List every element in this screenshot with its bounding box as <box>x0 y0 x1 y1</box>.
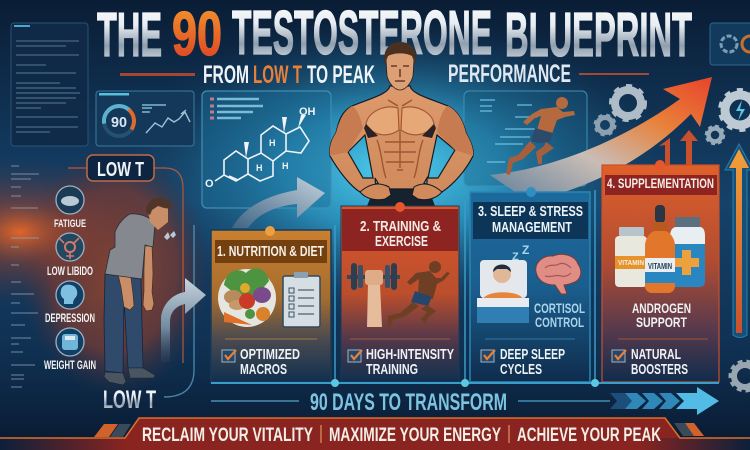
shirt <box>105 214 155 279</box>
icon: brain <box>536 254 581 294</box>
low T label <box>68 155 183 363</box>
panel: molecule chart: H <box>282 161 288 171</box>
icon: sleeping person: Z <box>522 243 529 257</box>
symptom: low libido <box>47 233 93 278</box>
check item: OPTIMIZED <box>240 346 300 363</box>
body <box>330 86 473 192</box>
check item: TRAINING <box>366 361 418 378</box>
hair <box>384 42 416 64</box>
shoulder shading <box>330 106 473 156</box>
check item: HIGH-INTENSITY <box>366 346 454 363</box>
figure: tired man <box>104 198 176 385</box>
panel: molecule chart: H <box>269 138 276 148</box>
title: 90 <box>172 0 222 69</box>
arms <box>115 246 154 311</box>
check item: BOOSTERS <box>631 361 688 378</box>
right up arrow channel <box>725 144 750 338</box>
icon: supplement bottles <box>615 205 705 293</box>
bottom banner: ACHIEVE YOUR PEAK <box>517 425 661 446</box>
panel: 4 supplementation: 4. SUPPLEMENTATION <box>607 176 714 191</box>
low T label: LOW T <box>97 159 144 181</box>
title <box>97 0 692 70</box>
symptom: depression: DEPRESSION <box>45 311 95 325</box>
icon: food plate <box>218 268 276 327</box>
symptom: fatigue: FATIGUE <box>54 218 86 230</box>
divider rails <box>335 190 595 383</box>
panel: 4 supplementation <box>602 160 719 382</box>
structural formula <box>215 126 309 181</box>
text: cortisol control: CORTISOL <box>534 300 585 316</box>
panel: 2 training and exercise: EXERCISE <box>375 233 428 250</box>
text: cortisol control: CONTROL <box>535 314 584 330</box>
face <box>391 66 409 81</box>
check item <box>481 346 565 378</box>
panel: 3 sleep and stress management: 3. SLEEP & STRESS <box>478 203 583 220</box>
jeans <box>104 274 143 373</box>
check item <box>348 346 454 378</box>
icon: supplement bottles: VITAMIN <box>648 262 672 271</box>
panel: data readout top left <box>11 23 88 146</box>
left side notes <box>11 166 39 387</box>
figure: muscular man <box>330 42 473 206</box>
icon: curved arrow to nutrition <box>161 278 206 362</box>
icon: dumbbell and arm <box>347 263 400 327</box>
timeline text: 90 days to transform: 90 DAYS TO TRANSFORM <box>310 389 507 416</box>
icon: checklist clipboard <box>283 272 320 327</box>
symptom: low libido: LOW LIBIDO <box>47 264 93 278</box>
panel: 2 training and exercise: 2. TRAINING & <box>360 218 441 235</box>
arrow: timeline progress <box>518 387 719 415</box>
hair <box>146 198 172 215</box>
check item <box>612 346 688 378</box>
icon: sleeping person <box>477 243 529 323</box>
text: cortisol control <box>534 300 585 330</box>
right hand <box>412 184 442 200</box>
text: androgen support: ANDROGEN <box>632 300 691 316</box>
panel: 3 sleep and stress management: MANAGEMENT <box>492 219 572 236</box>
subtitle: FROM <box>203 61 249 89</box>
title: THE <box>97 1 162 70</box>
head <box>147 205 168 230</box>
symptom: weight gain <box>44 328 96 372</box>
head <box>386 48 414 90</box>
check item: CYCLES <box>500 361 542 378</box>
symptom: weight gain: WEIGHT GAIN <box>44 358 96 372</box>
left hand <box>360 184 391 200</box>
icon: sprinter <box>387 261 450 327</box>
bottom banner: MAXIMIZE YOUR ENERGY <box>329 425 501 446</box>
icon: runner <box>506 97 575 175</box>
pectorals <box>366 107 434 135</box>
check item: DEEP SLEEP <box>500 346 565 363</box>
text: androgen support: SUPPORT <box>636 314 687 330</box>
underarm shadow <box>364 124 436 138</box>
panel: 1 nutrition and diet <box>211 226 331 382</box>
panel: dashboard with 90 gauge <box>96 91 194 146</box>
icon: curved arrow from molecule <box>232 177 325 228</box>
sweat drops <box>164 231 176 240</box>
timeline rail with nodes <box>211 379 719 387</box>
abs and muscle lines <box>377 100 423 178</box>
bottom banner: RECLAIM YOUR VITALITY <box>142 425 313 446</box>
bottom banner <box>0 418 750 450</box>
symptom: fatigue <box>54 186 86 230</box>
check item: NATURAL <box>631 346 681 363</box>
panel: runner display <box>464 91 587 186</box>
subtitle: TO PEAK <box>307 61 375 89</box>
panel: 1 nutrition and diet: 1. NUTRITION & DIET <box>217 243 324 260</box>
left bracket line <box>164 225 194 397</box>
small rising arrows <box>659 130 698 165</box>
label: low T under figure: LOW T <box>103 386 156 414</box>
text: androgen support <box>632 300 691 330</box>
symptom: depression <box>45 281 95 325</box>
panel: top right monitor <box>710 23 750 65</box>
panel: molecule chart: O <box>205 178 214 190</box>
shorts <box>367 187 435 206</box>
panel: 3 sleep and stress management <box>470 187 590 382</box>
subtitle: PERFORMANCE <box>448 60 571 88</box>
panel: dashboard with 90 gauge: 90 <box>111 114 127 131</box>
check item <box>222 346 300 378</box>
panel: molecule chart <box>202 91 331 208</box>
check item: MACROS <box>240 361 287 378</box>
subtitle <box>120 60 649 89</box>
panel: 2 training and exercise <box>341 202 459 382</box>
panel: molecule chart: OH <box>299 106 316 118</box>
icon: lower right gear <box>730 361 750 391</box>
icon: sleeping person: Z <box>512 251 519 263</box>
icon: gears <box>595 86 750 144</box>
subtitle: LOW T <box>253 61 302 89</box>
title: TESTOSTERONE <box>232 0 492 68</box>
icon: big rising arrow <box>490 77 712 202</box>
icon: supplement bottles: VITAMIN <box>618 260 644 267</box>
shoes <box>104 368 155 385</box>
panel: molecule chart: H <box>256 163 262 173</box>
